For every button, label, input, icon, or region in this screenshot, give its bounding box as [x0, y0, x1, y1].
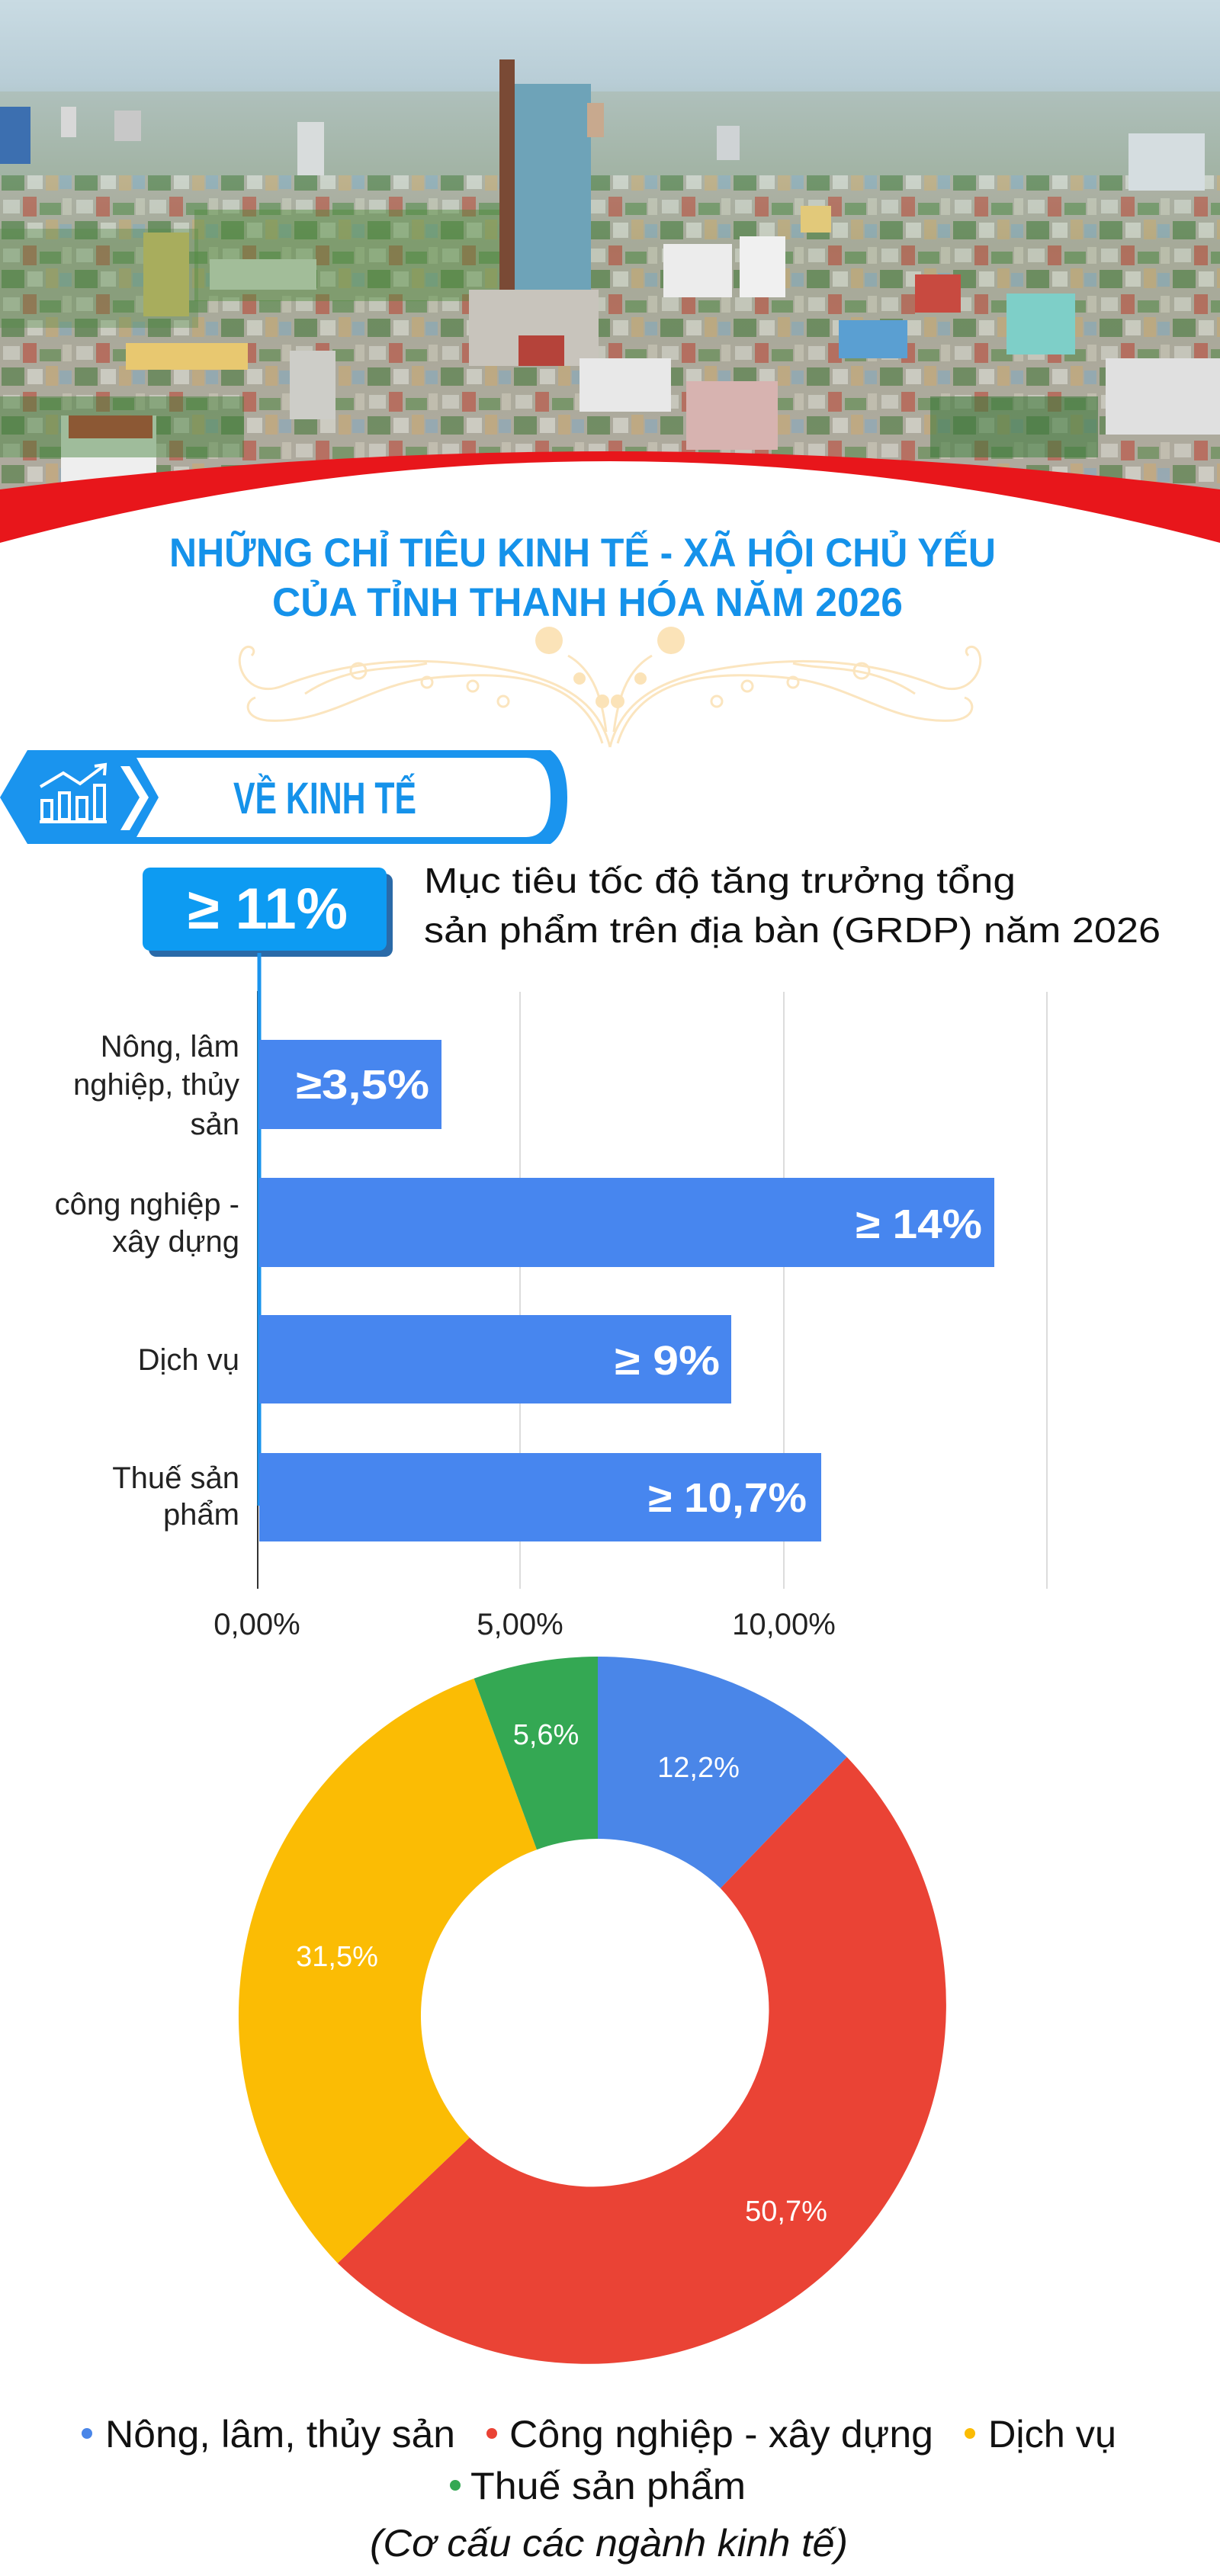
- heading text: VỀ KINH TẾ: [233, 774, 416, 823]
- legend: Thuế sản phẩm: [470, 2465, 746, 2507]
- donut chart: economic structure: 12,2%: [657, 1752, 740, 1784]
- bar chart: growth by sector: 0,00%: [214, 1608, 300, 1641]
- bar chart: growth by sector: [55, 953, 1047, 1641]
- section header: Về kinh tế: [0, 750, 567, 844]
- legend: Nông, lâm, thủy sản: [105, 2413, 455, 2456]
- bar chart: growth by sector: xây dựng: [112, 1225, 239, 1259]
- caption: (Cơ cấu các ngành kinh tế): [370, 2522, 848, 2565]
- bar chart: growth by sector: phẩm: [163, 1498, 239, 1532]
- icon: growth chart: [40, 765, 107, 822]
- legend: Dịch vụ: [988, 2413, 1116, 2456]
- GRDP description: sản phẩm trên địa bàn (GRDP) năm 2026: [424, 910, 1161, 950]
- bar chart: growth by sector: nghiệp, thủy: [73, 1068, 239, 1102]
- bar chart: growth by sector: ≥ 9%: [615, 1338, 720, 1384]
- bar chart: growth by sector: ≥3,5%: [296, 1062, 429, 1108]
- donut chart: economic structure: [239, 1657, 946, 2364]
- bar chart: growth by sector: công nghiệp -: [55, 1188, 239, 1221]
- donut chart: economic structure: 50,7%: [745, 2196, 827, 2228]
- bar chart: growth by sector: Dịch vụ: [138, 1343, 239, 1377]
- bar chart: growth by sector: sản: [191, 1108, 239, 1141]
- legend: Công nghiệp - xây dựng: [509, 2413, 933, 2456]
- bar chart: growth by sector: Thuế sản: [112, 1461, 239, 1495]
- legend: [82, 2413, 1116, 2507]
- title: [169, 529, 996, 625]
- red arc frame: [0, 451, 1220, 564]
- callout: ≥11%: ≥ 11%: [188, 877, 348, 942]
- bar chart: growth by sector: 10,00%: [732, 1608, 836, 1641]
- ornament: [239, 646, 981, 747]
- donut chart: economic structure: 31,5%: [296, 1941, 378, 1973]
- title: CỦA TỈNH THANH HÓA NĂM 2026: [272, 579, 903, 625]
- header photo: city skyline: [0, 0, 1220, 549]
- donut chart: economic structure: 5,6%: [513, 1719, 579, 1751]
- bar chart: growth by sector: 5,00%: [477, 1608, 563, 1641]
- bar chart: growth by sector: ≥ 14%: [856, 1201, 982, 1247]
- bar chart: growth by sector: ≥ 10,7%: [648, 1475, 807, 1521]
- GRDP description: [424, 861, 1161, 950]
- title: NHỮNG CHỈ TIÊU KINH TẾ - XÃ HỘI CHỦ YẾU: [169, 529, 996, 576]
- callout: ≥11%: [143, 868, 393, 957]
- bar chart: growth by sector: Nông, lâm: [101, 1030, 239, 1063]
- GRDP description: Mục tiêu tốc độ tăng trưởng tổng: [424, 861, 1016, 900]
